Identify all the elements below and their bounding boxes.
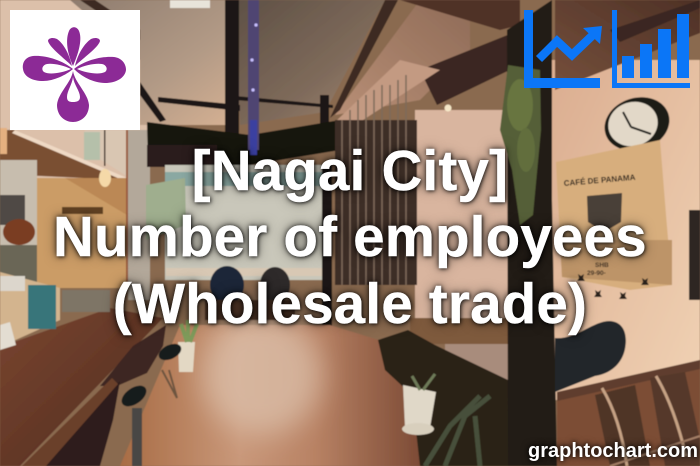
icon: line chart with arrow [524, 10, 602, 88]
icons: blue chart icons [524, 10, 690, 88]
white plant pot [402, 374, 436, 435]
title: (Wholesale trade) [113, 272, 587, 334]
wall: right [550, 0, 700, 400]
hanging curtain [335, 75, 417, 285]
counter with items [0, 272, 163, 466]
plaid sofa [557, 360, 700, 466]
pillar [507, 0, 557, 466]
wall: left lower [0, 130, 150, 300]
wall clock [598, 89, 676, 159]
watermark: graphtochart.com [528, 440, 698, 462]
title [48, 138, 651, 340]
dark wood table and lower plants [378, 318, 508, 466]
coffee sack poster: CAFÉ DE PANAMA [563, 173, 636, 188]
coffee sack poster: 29-90- [587, 270, 606, 277]
icon: bar chart [612, 10, 690, 88]
bar stools [22, 325, 184, 466]
ceiling panels [70, 0, 520, 135]
central window [146, 165, 332, 355]
wall: middle right [415, 110, 508, 325]
coffee sack poster [556, 140, 672, 299]
hanging vine [500, 65, 541, 225]
floor [120, 325, 435, 466]
string lights [248, 0, 259, 155]
ceiling black post and beams [140, 0, 340, 167]
chairs by the window [205, 266, 295, 320]
title: Number of employees [53, 205, 647, 268]
framed picture on the right wall [689, 210, 700, 300]
logo: white card with purple city emblem [10, 10, 140, 130]
navy chair behind the sofa [555, 321, 626, 392]
emblem flower [23, 27, 126, 122]
title: [Nagai City] [192, 138, 508, 202]
pendant lamps [0, 104, 452, 187]
potted plant by the counter [178, 320, 197, 372]
wall: left upper [0, 0, 150, 182]
coffee sack poster: SHB [595, 262, 609, 269]
